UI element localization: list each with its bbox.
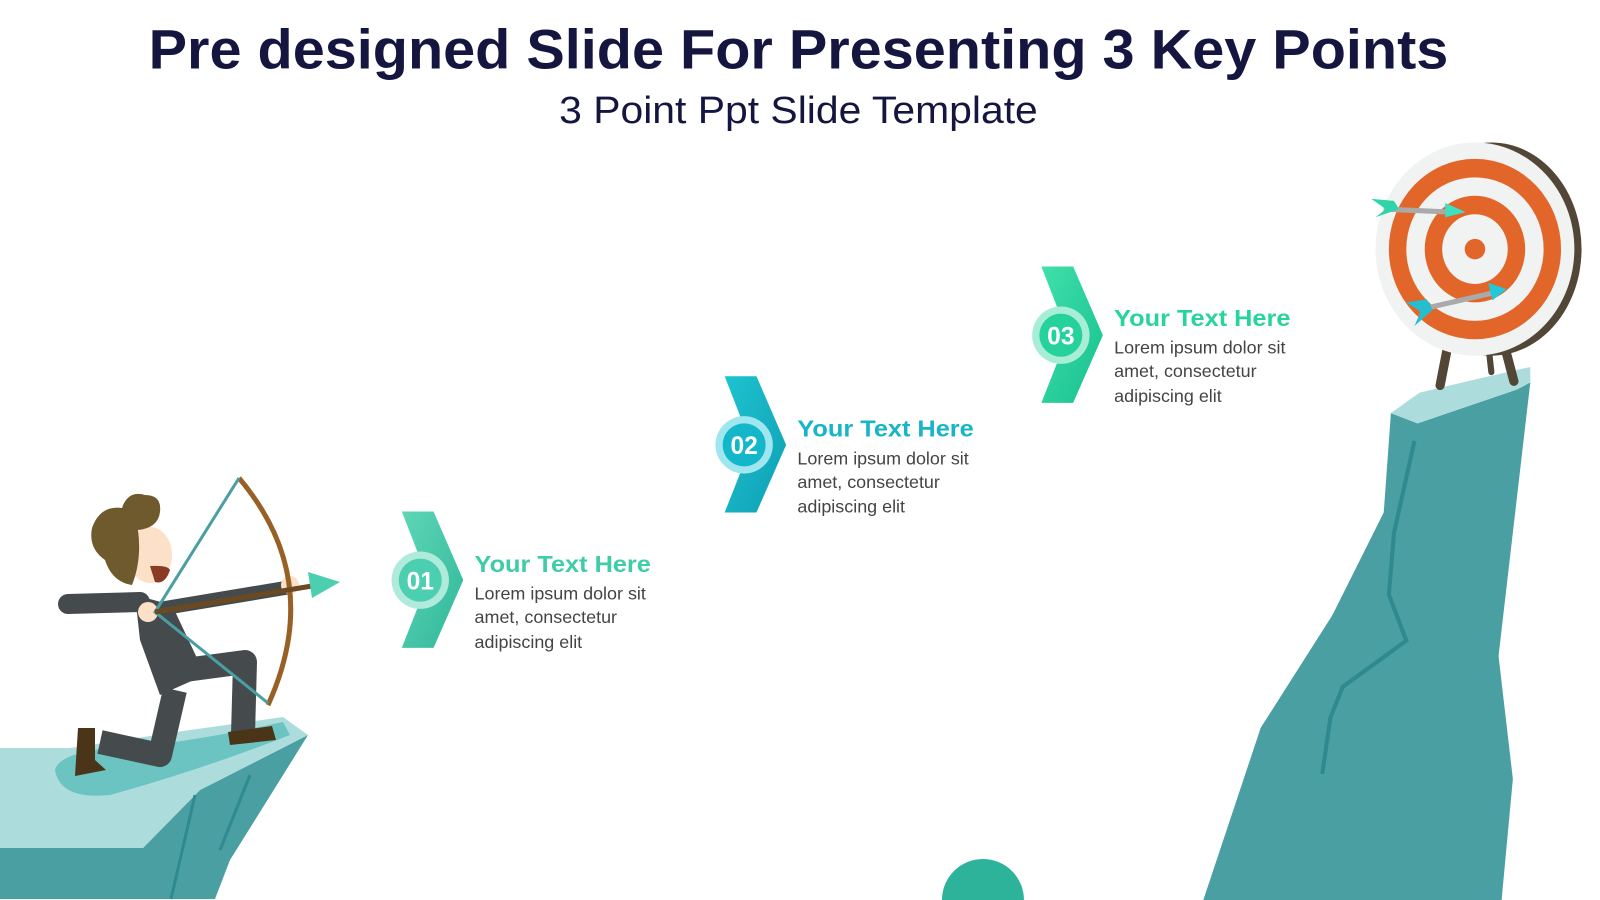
front arm <box>165 588 285 608</box>
back leg <box>100 690 175 755</box>
chevron 03 <box>1041 267 1103 403</box>
text 03: amet, consectetur <box>1114 361 1257 381</box>
bow string <box>155 478 268 703</box>
title: Pre designed Slide For Presenting 3 Key Points <box>149 19 1448 81</box>
text 02: Your Text Here <box>797 416 974 442</box>
text 02: amet, consectetur <box>797 472 940 492</box>
arrow <box>155 586 312 612</box>
target <box>1371 142 1582 385</box>
point 02 <box>715 376 974 517</box>
text 01 <box>475 551 651 652</box>
left cliff <box>0 717 308 899</box>
circle 01 <box>392 551 449 609</box>
text 03: adipiscing elit <box>1114 386 1222 406</box>
circle 02: 02 <box>730 433 758 460</box>
text 03: Your Text Here <box>1114 305 1290 331</box>
head <box>128 527 172 583</box>
front leg <box>185 662 245 735</box>
arrow in target 2 <box>1406 283 1507 326</box>
circle 02 <box>715 416 773 474</box>
text 02: Lorem ipsum dolor sit <box>797 448 969 468</box>
text 03: Lorem ipsum dolor sit <box>1114 338 1285 358</box>
circle 03 <box>1032 306 1090 364</box>
right cliff <box>1203 367 1530 900</box>
text 03 <box>1114 305 1290 406</box>
chevron 01 <box>402 512 463 648</box>
bottom half circle <box>942 859 1024 900</box>
text 01: Your Text Here <box>475 551 651 577</box>
archer <box>68 478 340 776</box>
text 02 <box>797 416 974 517</box>
text 01: adipiscing elit <box>475 632 582 652</box>
text 02: adipiscing elit <box>797 497 905 517</box>
back arm <box>68 602 140 604</box>
point 01 <box>392 512 651 652</box>
chevron 02 <box>725 376 786 513</box>
torso <box>135 595 205 695</box>
text 01: Lorem ipsum dolor sit <box>475 584 646 604</box>
shoes <box>75 728 106 776</box>
point 03 <box>1032 267 1290 406</box>
circle 03: 03 <box>1047 323 1075 350</box>
subtitle: 3 Point Ppt Slide Template <box>559 90 1038 132</box>
circle 01: 01 <box>407 568 434 595</box>
hands <box>138 602 158 622</box>
bow <box>239 478 291 705</box>
target legs <box>1440 346 1514 385</box>
text 01: amet, consectetur <box>475 607 617 627</box>
arrow in target 1 <box>1371 199 1466 217</box>
left cliff and archer <box>0 478 340 899</box>
